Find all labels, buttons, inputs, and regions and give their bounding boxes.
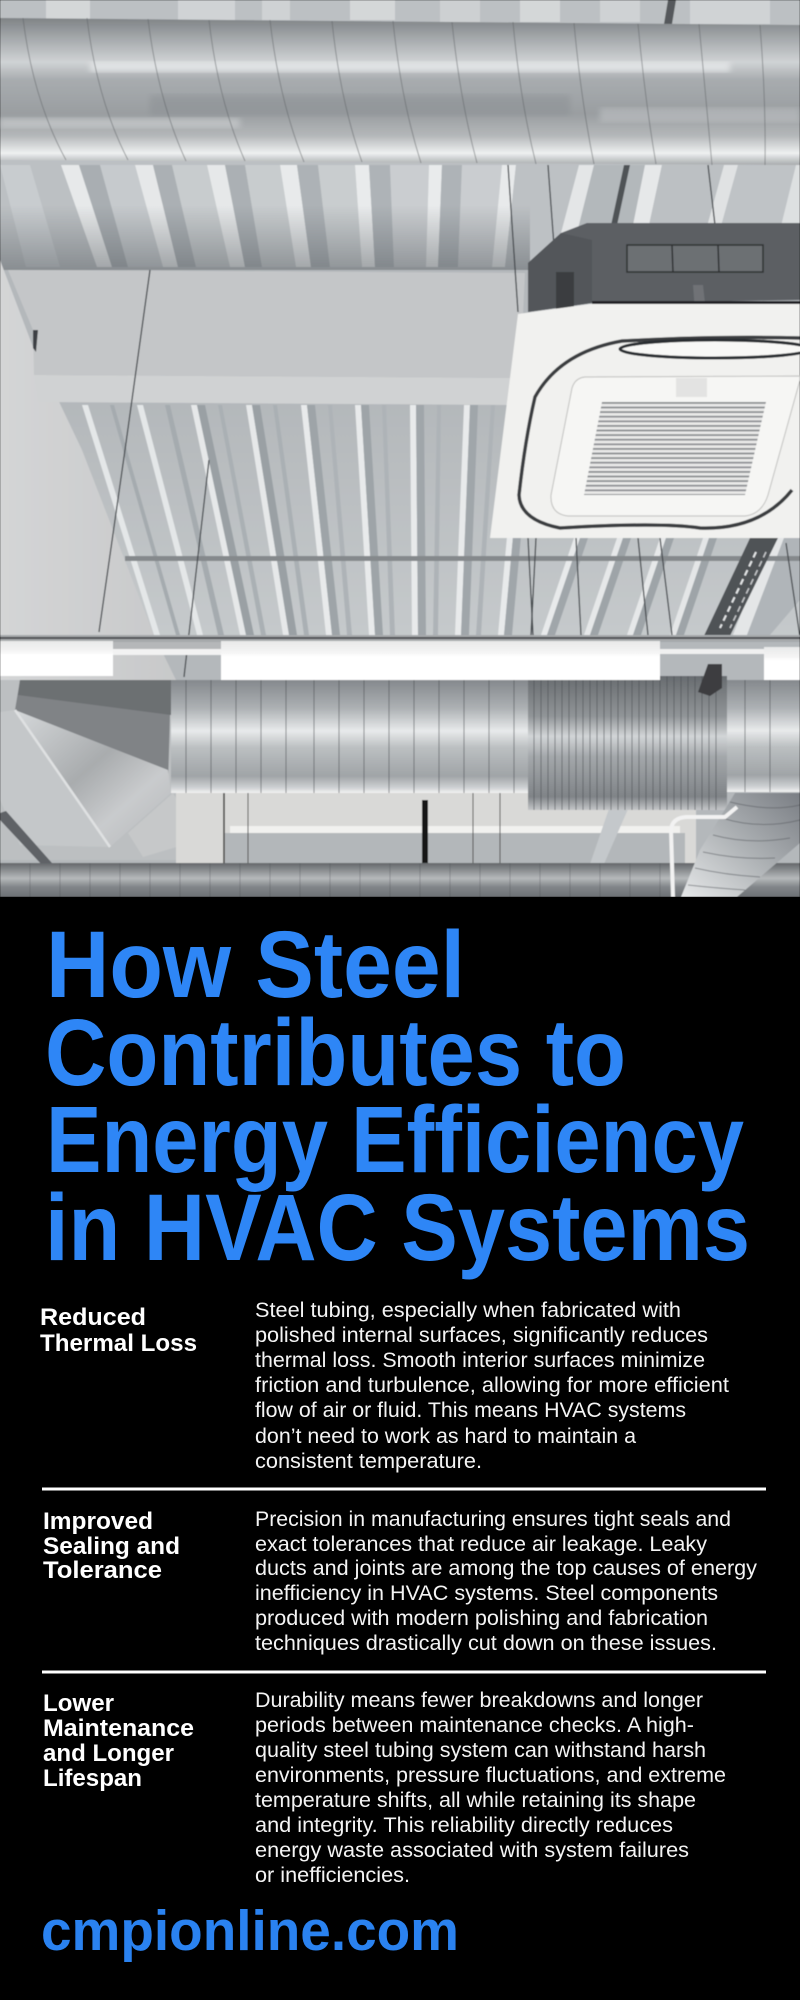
fluorescent light fixtures [0,641,800,680]
text: reduced thermal loss: friction and turbulence, allowing for more efficient [255,1374,729,1397]
text: improved sealing and tolerance: ducts and joints are among the top causes of energy [255,1557,758,1580]
title: How Steel [46,912,465,1018]
title [45,912,750,1281]
cassette top air outlet [620,340,800,358]
text: improved sealing and tolerance: exact tolerances that reduce air leakage. Leaky [255,1533,708,1556]
text: lower maintenance and longer lifespan [255,1689,726,1887]
text: improved sealing and tolerance: techniques drastically cut down on these issues. [255,1632,717,1655]
heading: lower maintenance and longer lifespan: Maintenance [43,1715,194,1742]
air conditioning white ceiling cassette [490,304,800,538]
big duct: cone transition [0,680,176,864]
heading: improved sealing and tolerance: Tolerance [43,1557,162,1584]
light rail [0,635,800,655]
hanger wires [99,165,800,677]
text: improved sealing and tolerance: produced with modern polishing and fabrication [255,1607,708,1630]
white box beam [8,270,525,405]
text: lower maintenance and longer lifespan: energy waste associated with system failures [255,1839,689,1862]
text: reduced thermal loss [255,1299,729,1473]
diagonal flexible duct [671,793,800,897]
text: improved sealing and tolerance [255,1508,758,1655]
heading: reduced thermal loss: Reduced [40,1304,146,1331]
section: improved sealing and tolerance [43,1508,758,1655]
section: lower maintenance and longer lifespan [43,1689,726,1887]
text: lower maintenance and longer lifespan: temperature shifts, all while retaining its shape [255,1789,696,1812]
website url: cmpionline.com [41,1899,459,1963]
top spiral steel duct [0,18,800,165]
text: lower maintenance and longer lifespan: and integrity. This reliability directly reduces [255,1814,673,1837]
text: lower maintenance and longer lifespan: Durability means fewer breakdowns and longer [255,1689,703,1712]
text: improved sealing and tolerance: Precision in manufacturing ensures tight seals and [255,1508,731,1531]
cassette louvre outline [519,337,800,528]
air conditioning housing [528,223,800,312]
security camera [698,664,722,696]
left wall [0,260,176,680]
text: reduced thermal loss: thermal loss. Smooth interior surfaces minimize [255,1349,705,1372]
big duct: spiral body [171,676,800,810]
heading: lower maintenance and longer lifespan: Lower [43,1690,114,1717]
section: reduced thermal loss [40,1299,729,1473]
text: improved sealing and tolerance: inefficiency in HVAC systems. Steel components [255,1582,718,1605]
area below the big duct [176,792,696,864]
text: lower maintenance and longer lifespan: environments, pressure fluctuations, and extreme [255,1764,726,1787]
text: reduced thermal loss: don’t need to work as hard to maintain a [255,1425,636,1448]
cross beam and cable tray [125,538,800,640]
lower long duct [0,863,800,897]
text: reduced thermal loss: consistent temperature. [255,1450,482,1473]
heading: reduced thermal loss [40,1304,197,1357]
heading: lower maintenance and longer lifespan: Lifespan [43,1765,142,1792]
text: reduced thermal loss: polished internal surfaces, significantly reduces [255,1324,708,1347]
text: lower maintenance and longer lifespan: periods between maintenance checks. A high- [255,1714,694,1737]
text: lower maintenance and longer lifespan: quality steel tubing system can withstand harsh [255,1739,706,1762]
cassette label square [676,378,707,397]
heading: improved sealing and tolerance [43,1508,180,1584]
heading: lower maintenance and longer lifespan [43,1690,194,1792]
heading: improved sealing and tolerance: Improved [43,1508,153,1535]
photo: ceiling ducts and air conditioning unit [0,0,800,897]
text: reduced thermal loss: flow of air or fluid. This means HVAC systems [255,1399,686,1422]
heading: reduced thermal loss: Thermal Loss [40,1330,197,1357]
title: Contributes to [45,1000,626,1106]
lower corrugated ceiling [82,404,800,636]
corrugated ceiling above and behind the top duct [0,0,800,270]
text: lower maintenance and longer lifespan: or inefficiencies. [255,1864,410,1887]
heading: improved sealing and tolerance: Sealing and [43,1533,180,1560]
cassette vent grille [584,402,766,495]
text: reduced thermal loss: Steel tubing, especially when fabricated with [255,1299,681,1322]
heading: lower maintenance and longer lifespan: and Longer [43,1740,174,1767]
